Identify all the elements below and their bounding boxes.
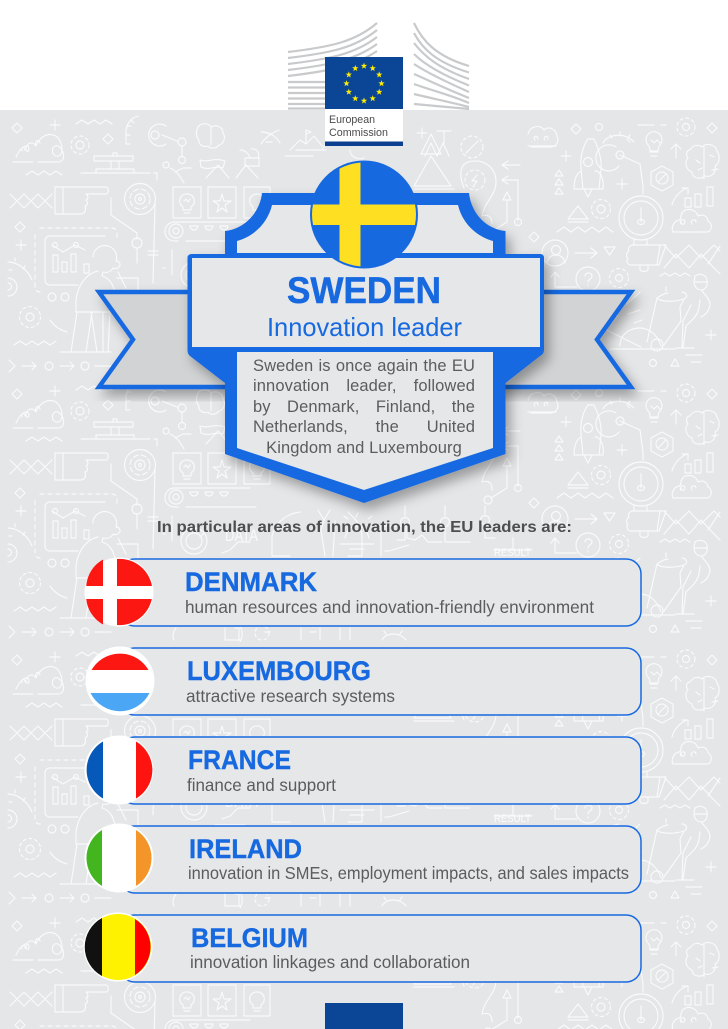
logo flag panel [325,57,403,109]
patterned grey background: RESULT [494,813,531,825]
row: Denmark [84,558,641,626]
paragraph: Sweden summary [253,357,475,457]
patterned grey background: DATA [225,526,258,545]
row: Luxembourg [86,646,641,716]
description: Ireland: innovation in SMEs, employment impacts, and sales impacts [188,863,629,883]
icon: Danish flag [84,558,154,626]
shield: blue outer shape [188,193,544,503]
patterned grey background: RESULT [494,547,531,559]
paragraph: Sweden summary: innovation leader, followed [253,377,475,395]
icon: Swedish flag [310,160,418,270]
European Commission logo: Commission [329,127,388,139]
icon: Belgian flag [84,912,152,982]
paragraph: Sweden summary: Sweden is once again the EU [253,357,475,375]
European Commission logo: European [329,114,375,126]
label: Denmark: DENMARK [185,567,317,597]
ribbon: right tail [490,292,631,387]
paragraph: Sweden summary: Kingdom and Luxembourg [266,439,462,457]
description: France: finance and support [187,775,336,795]
description: Belgium: innovation linkages and collaboration [190,952,470,972]
row: Ireland [84,824,641,893]
badge: Sweden [99,160,631,503]
European Commission logo [288,23,469,146]
paragraph: Sweden summary: by Denmark, Finland, the [253,398,475,416]
label: Belgium: BELGIUM [191,923,308,953]
icon: Luxembourg flag [86,646,154,716]
title panel [192,258,540,347]
description: Denmark: human resources and innovation-friendly environment [185,597,594,617]
heading: SWEDEN: SWEDEN [287,270,441,311]
paragraph: Sweden summary: Netherlands, the United [253,418,475,436]
icon: French flag [84,736,154,804]
intro line: In particular areas of innovation, the EU leaders are: [157,519,572,536]
shield: upper inner panel [237,205,493,253]
ribbon: left tail [99,292,240,387]
icon: Irish flag [84,824,154,892]
row: Belgium [84,912,641,982]
label: Ireland: IRELAND [189,834,302,864]
patterned grey background: DATA [225,792,258,811]
label: France: FRANCE [188,745,291,775]
shield: lower text panel [237,352,493,490]
row: France [84,736,641,804]
subheading: Innovation leader: Innovation leader [267,312,462,342]
footer blue block [325,1003,403,1029]
icon: Berlaymont building wings [288,23,377,108]
label: Luxembourg: LUXEMBOURG [187,656,371,686]
description: Luxembourg: attractive research systems [186,686,395,706]
